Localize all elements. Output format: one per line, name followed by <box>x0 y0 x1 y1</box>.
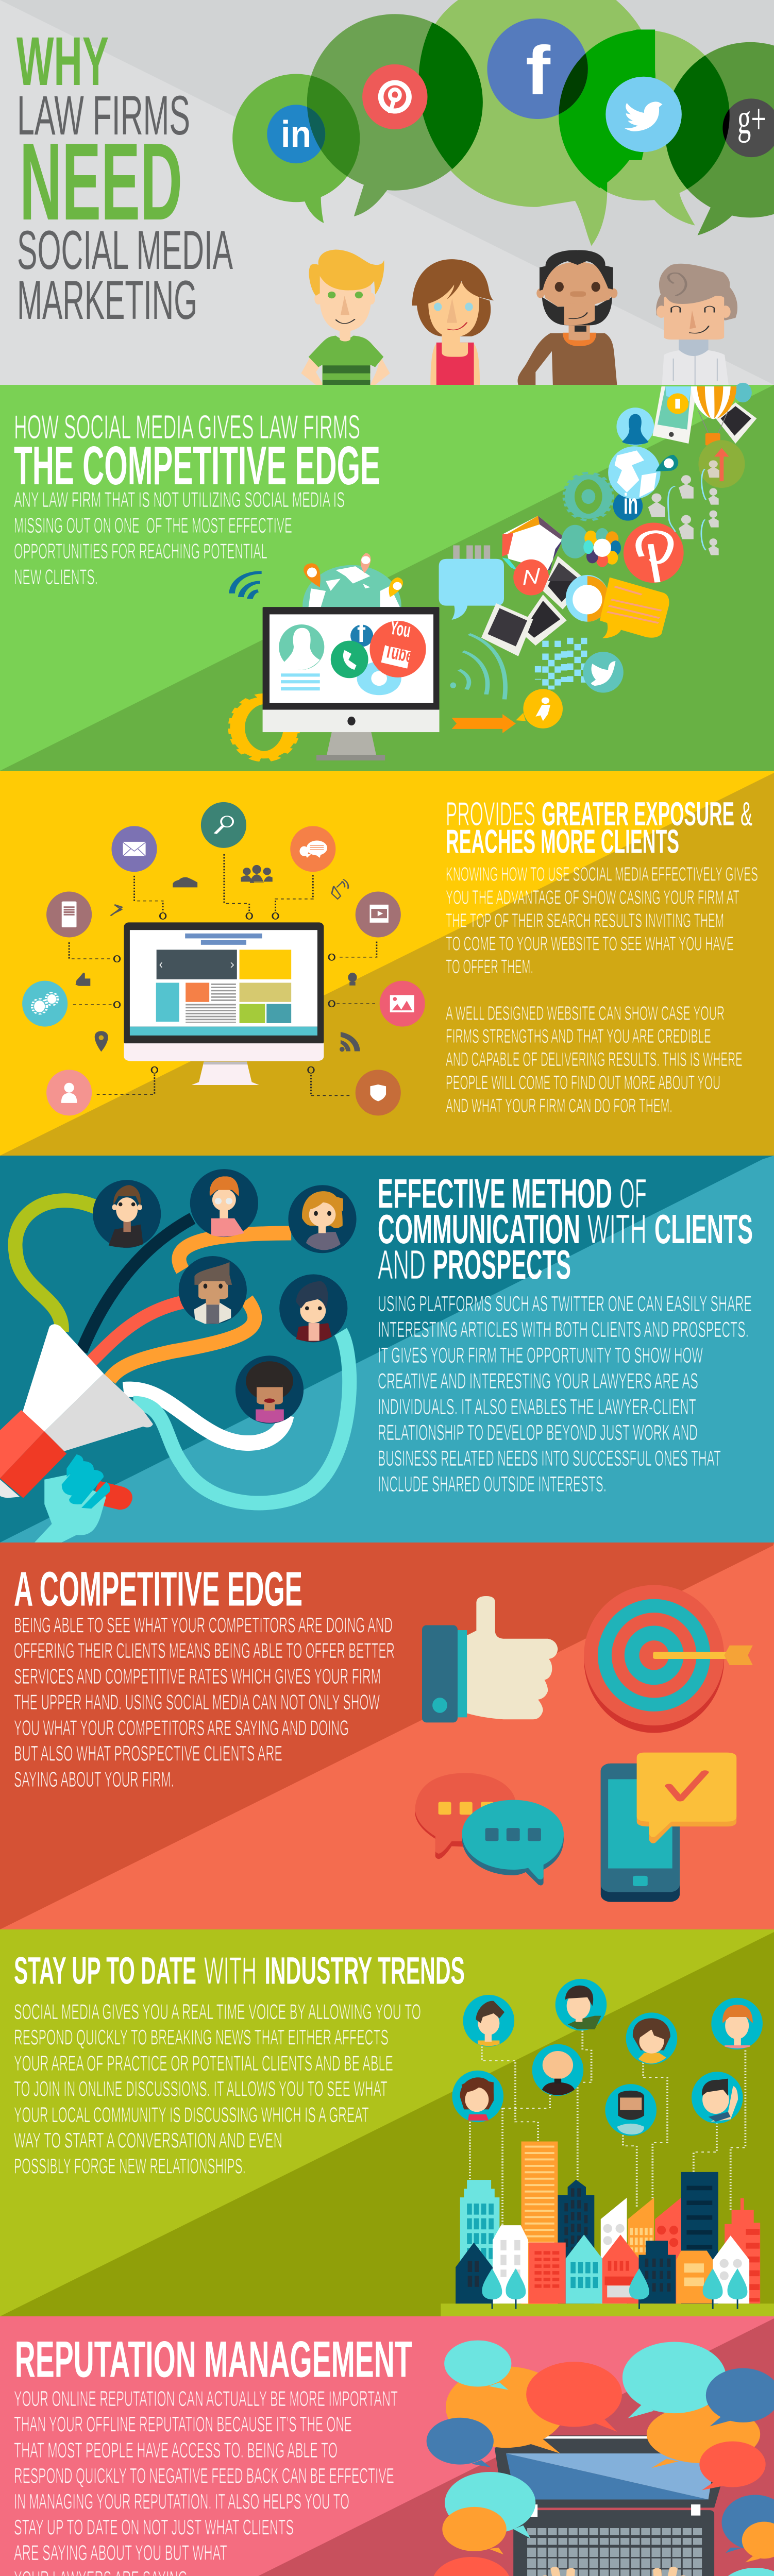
monitor <box>263 607 440 760</box>
icon: smartphone <box>46 892 92 938</box>
portrait: man in coat <box>179 1256 247 1324</box>
laptop <box>495 2435 721 2576</box>
text block: ANY LAW FIRM THAT IS NOT UTILIZING SOCIAL MEDIA IS <box>14 487 345 512</box>
heading: REPUTATION MANAGEMENT <box>15 2330 412 2387</box>
portrait: woman in red <box>279 1274 347 1342</box>
text block: BUT ALSO WHAT PROSPECTIVE CLIENTS ARE <box>14 1741 282 1766</box>
icon: video <box>356 892 401 938</box>
small dark icons <box>76 865 360 1052</box>
text block: POSSIBLY FORGE NEW RELATIONSHIPS. <box>14 2154 246 2178</box>
connector lines <box>69 854 377 1096</box>
text block: THAN YOUR OFFLINE REPUTATION BECAUSE IT'S THE ONE <box>14 2412 352 2436</box>
portraits <box>452 1979 763 2136</box>
gears and globe <box>565 408 678 521</box>
text block: BEING ABLE TO SEE WHAT YOUR COMPETITORS ARE DOING AND <box>14 1613 393 1637</box>
heading: COMMUNICATION <box>378 1206 580 1252</box>
title: MARKETING <box>17 269 197 331</box>
title: WHY <box>16 23 109 100</box>
text block <box>446 863 758 1117</box>
text block: RESPOND QUICKLY TO NEGATIVE FEED BACK CAN BE EFFECTIVE <box>14 2464 394 2487</box>
badge labels: f <box>357 617 366 648</box>
icon: network badge <box>513 560 549 596</box>
person: older man <box>656 264 737 385</box>
illustration: megaphone and people <box>0 1169 357 1543</box>
icon: chat bubbles <box>415 1773 564 1886</box>
portrait 4 <box>626 2012 677 2064</box>
badge labels: Tube <box>383 640 415 667</box>
heading: HOW SOCIAL MEDIA GIVES LAW FIRMS <box>14 408 360 446</box>
icon: mail <box>111 826 157 872</box>
monitor <box>124 922 324 1085</box>
panel: industry trends <box>0 1929 774 2316</box>
icon labels <box>281 32 766 155</box>
title: LAW FIRMS <box>17 84 190 146</box>
illustration: website monitor with icons <box>22 802 425 1115</box>
text block <box>14 487 345 589</box>
illustration: network over city <box>441 1979 774 2316</box>
portrait 1 <box>463 1995 514 2046</box>
icon: twitter <box>605 77 682 152</box>
text block: ARE SAYING ABOUT YOU BUT WHAT <box>14 2540 227 2565</box>
text block: STAY UP TO DATE ON NOT JUST WHAT CLIENTS <box>14 2515 294 2539</box>
orange and white orb <box>566 575 609 622</box>
icon: pinterest badge <box>624 522 684 583</box>
text block: YOUR AREA OF PRACTICE OR POTENTIAL CLIENTS AND BE ABLE <box>14 2051 393 2075</box>
person: bearded man <box>518 250 617 385</box>
icon: chat <box>290 826 335 872</box>
icon: yellow note bubble <box>600 578 669 638</box>
heading: PROVIDES <box>446 795 535 833</box>
illustration: social speech bubbles <box>232 0 774 246</box>
icon: shield <box>356 1070 401 1115</box>
illustration: four people <box>301 250 737 385</box>
text block: IN MANAGING YOUR REPUTATION. IT ALSO HELPS YOU TO <box>14 2489 349 2514</box>
heading <box>14 408 380 496</box>
portrait 6 <box>452 2071 503 2122</box>
icon: search <box>201 802 246 848</box>
dotted connectors <box>470 2030 745 2225</box>
heading: PROSPECTS <box>433 1242 571 1287</box>
heading: WITH <box>204 1949 257 1992</box>
text block: SOCIAL MEDIA GIVES YOU A REAL TIME VOICE BY ALLOWING YOU TO <box>14 1999 421 2024</box>
portrait: woman with afro <box>235 1355 304 1423</box>
title <box>16 23 233 331</box>
connector rings <box>114 913 334 1073</box>
icon: flower <box>561 525 621 567</box>
person: blond man <box>301 250 390 385</box>
icon: wifi <box>232 572 262 599</box>
illustration: monitor and social icons <box>231 383 756 760</box>
portrait: woman with glasses <box>190 1169 258 1237</box>
title: NEED <box>20 121 182 243</box>
portrait 7 <box>605 2084 657 2136</box>
text block: SAYING ABOUT YOUR FIRM. <box>14 1767 174 1791</box>
heading: THE COMPETITIVE EDGE <box>14 435 380 496</box>
icon: google plus <box>722 98 774 157</box>
ribbons <box>15 1200 349 1503</box>
speech bubbles <box>427 2341 774 2576</box>
icon: user <box>46 1070 92 1115</box>
hand <box>35 1454 110 1543</box>
text block: TO JOIN IN ONLINE DISCUSSIONS. IT ALLOWS YOU TO SEE WHAT <box>14 2076 388 2101</box>
panel: a competitive edge <box>0 1543 774 1929</box>
city skyline <box>441 2142 774 2316</box>
icon: thumbs up <box>422 1596 558 1722</box>
panel: effective method of communication <box>0 1156 774 1543</box>
text block: YOUR LOCAL COMMUNITY IS DISCUSSING WHICH IS A GREAT <box>14 2103 369 2127</box>
icon: pinterest <box>362 64 428 129</box>
text block <box>14 2386 398 2576</box>
illustration: laptop and chat bubbles <box>427 2341 774 2576</box>
portrait: blonde woman <box>288 1185 357 1253</box>
icon: gears <box>22 981 68 1027</box>
badge labels <box>357 487 638 667</box>
heading <box>446 795 752 860</box>
speech bubble <box>439 546 504 620</box>
icon labels: f <box>526 32 550 109</box>
text block <box>14 1613 395 1791</box>
heading: AND <box>378 1242 426 1287</box>
icon: yellow gear <box>231 695 297 760</box>
panel: reputation management <box>0 2316 774 2576</box>
portrait 5 <box>711 1998 763 2049</box>
text block: YOUR ONLINE REPUTATION CAN ACTUALLY BE MORE IMPORTANT <box>14 2386 398 2411</box>
text block: TO OFFER THEM. <box>446 956 533 978</box>
heading: INDUSTRY TRENDS <box>265 1949 465 1992</box>
text block: NEW CLIENTS. <box>14 565 98 589</box>
icon: person badge <box>516 689 563 728</box>
text block: WAY TO START A CONVERSATION AND EVEN <box>14 2128 282 2153</box>
icon: target and arrow <box>584 1585 753 1733</box>
portrait 8 <box>692 2072 743 2124</box>
badge labels: in <box>624 487 638 520</box>
text block: YOU WHAT YOUR COMPETITORS ARE SAYING AND DOING <box>14 1716 349 1740</box>
dots and arcs <box>450 634 584 699</box>
text block: RESPOND QUICKLY TO BREAKING NEWS THAT EITHER AFFECTS <box>14 2025 389 2049</box>
badge labels: You <box>388 617 412 642</box>
heading: OF <box>619 1171 647 1216</box>
text block: OPPORTUNITIES FOR REACHING POTENTIAL <box>14 539 267 563</box>
icon: linkedin <box>267 105 325 163</box>
panel: greater exposure <box>0 771 774 1156</box>
text block: OFFERING THEIR CLIENTS MEANS BEING ABLE TO OFFER BETTER <box>14 1638 395 1663</box>
heading: WITH <box>587 1206 647 1252</box>
photo right <box>716 383 756 444</box>
illustration: icons <box>415 1585 753 1902</box>
title: SOCIAL MEDIA <box>17 219 233 281</box>
icon: facebook <box>487 19 588 119</box>
panel: the competitive edge <box>0 383 774 771</box>
heading: & <box>741 795 752 833</box>
icon: phone with check bubble <box>601 1753 736 1902</box>
hands <box>533 2567 695 2576</box>
text block: THE UPPER HAND. USING SOCIAL MEDIA CAN NOT ONLY SHOW <box>14 1690 380 1714</box>
portrait 3 <box>532 2044 583 2096</box>
icon: image <box>380 981 425 1027</box>
hot air balloon <box>691 386 736 446</box>
text block: THAT MOST PEOPLE HAVE ACCESS TO. BEING ABLE TO <box>14 2438 338 2462</box>
photos <box>481 556 587 656</box>
arrow <box>451 714 516 733</box>
icon: globe with pins <box>302 553 403 647</box>
text block <box>14 1999 421 2178</box>
growth people <box>648 440 745 555</box>
heading: A COMPETITIVE EDGE <box>14 1562 302 1617</box>
text block: MISSING OUT ON ONE OF THE MOST EFFECTIVE <box>14 513 292 537</box>
hexagon badge <box>502 516 564 571</box>
text block <box>378 1292 752 1497</box>
icon labels: in <box>281 114 311 155</box>
portrait 2 <box>556 1979 607 2030</box>
panel: header <box>0 0 774 385</box>
tablet <box>652 386 697 444</box>
heading <box>378 1171 753 1287</box>
portrait: man in suit <box>93 1180 161 1248</box>
text block: SERVICES AND COMPETITIVE RATES WHICH GIVES YOUR FIRM <box>14 1664 381 1688</box>
person: woman <box>412 259 494 385</box>
heading: STAY UP TO DATE <box>14 1949 196 1992</box>
megaphone <box>0 1324 153 1510</box>
icon: twitter badge <box>583 652 624 693</box>
